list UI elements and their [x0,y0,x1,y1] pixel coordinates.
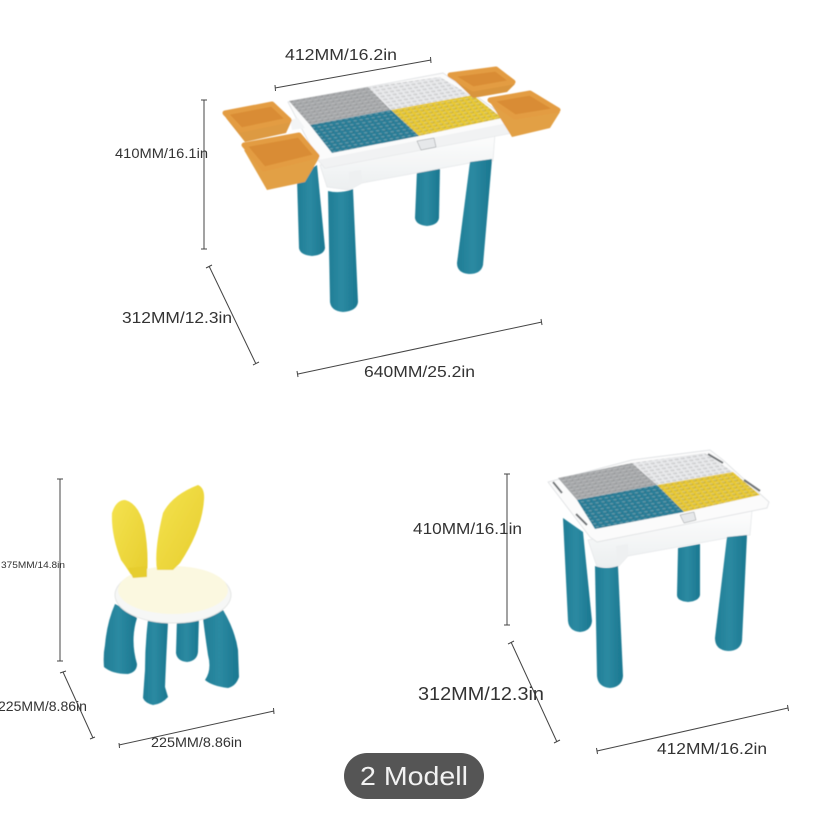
dimension: large table top width [275,47,431,91]
back left leg [297,165,325,256]
dimension: chair width: 225MM/8.86in [151,734,242,750]
badge: 2 Modell [344,753,484,799]
dimension: large table height [115,100,208,249]
bin front left [244,135,319,190]
tabletop front edge [318,122,513,168]
plate: white [368,77,470,110]
dimension: large table depth [122,265,259,365]
right leg [203,610,239,688]
dimension: small table height [413,474,522,625]
dimension: small table width: 412MM/16.2in [657,741,767,758]
plate: yellow [391,95,502,136]
dimension: chair depth [0,671,95,739]
center leg [143,620,168,705]
dimension: large table depth: 312MM/12.3in [122,310,232,327]
bin back right [450,69,515,98]
bin holder tabs [290,116,516,130]
table apron [320,133,495,190]
center latch [680,512,696,523]
back right leg [677,544,700,602]
dimension: chair height [1,479,65,661]
right ear [156,485,204,570]
large table with four bins [225,69,560,312]
dimension: chair depth: 225MM/8.86in [0,698,87,714]
plate: blue [577,485,684,529]
dimension: small table height: 410MM/16.1in [413,521,522,538]
dimension: small table depth: 312MM/12.3in [418,684,544,704]
plate: gray [558,463,657,500]
left ear base over seat [128,566,147,578]
dimension: large table length: 640MM/25.2in [364,364,475,381]
plate: white [632,453,733,485]
dimension: large table height: 410MM/16.1in [115,145,208,161]
dimension: large table length [297,319,542,381]
rabbit chair [104,485,239,705]
front left leg [328,189,358,312]
front right leg [715,535,747,651]
bin back left [225,104,292,142]
dimension: chair height: 375MM/14.8in [1,560,65,570]
tabletop [548,450,769,542]
front right leg [457,159,492,274]
dimension: large table top width: 412MM/16.2in [285,47,397,64]
plate: blue [310,110,419,153]
center latch [417,138,436,150]
tabletop [288,73,513,168]
plate: gray [289,87,391,125]
seat [115,566,231,623]
dimension: small table depth [418,641,560,743]
plate: yellow [657,472,760,512]
left leg [104,604,137,674]
bin front right [490,93,560,137]
left ear [112,500,148,578]
back left leg [563,518,592,632]
dimension: chair width [119,708,274,750]
back leg [176,616,199,662]
table apron [588,510,752,567]
small table [548,450,769,688]
front left leg [595,566,623,688]
badge: 2 Modell: 2 Modell [360,761,468,791]
dimension: small table width [596,705,788,758]
back right leg [415,166,440,226]
apron corner shading [349,170,362,190]
bin slots [553,454,760,525]
apron corner shading [616,544,628,567]
